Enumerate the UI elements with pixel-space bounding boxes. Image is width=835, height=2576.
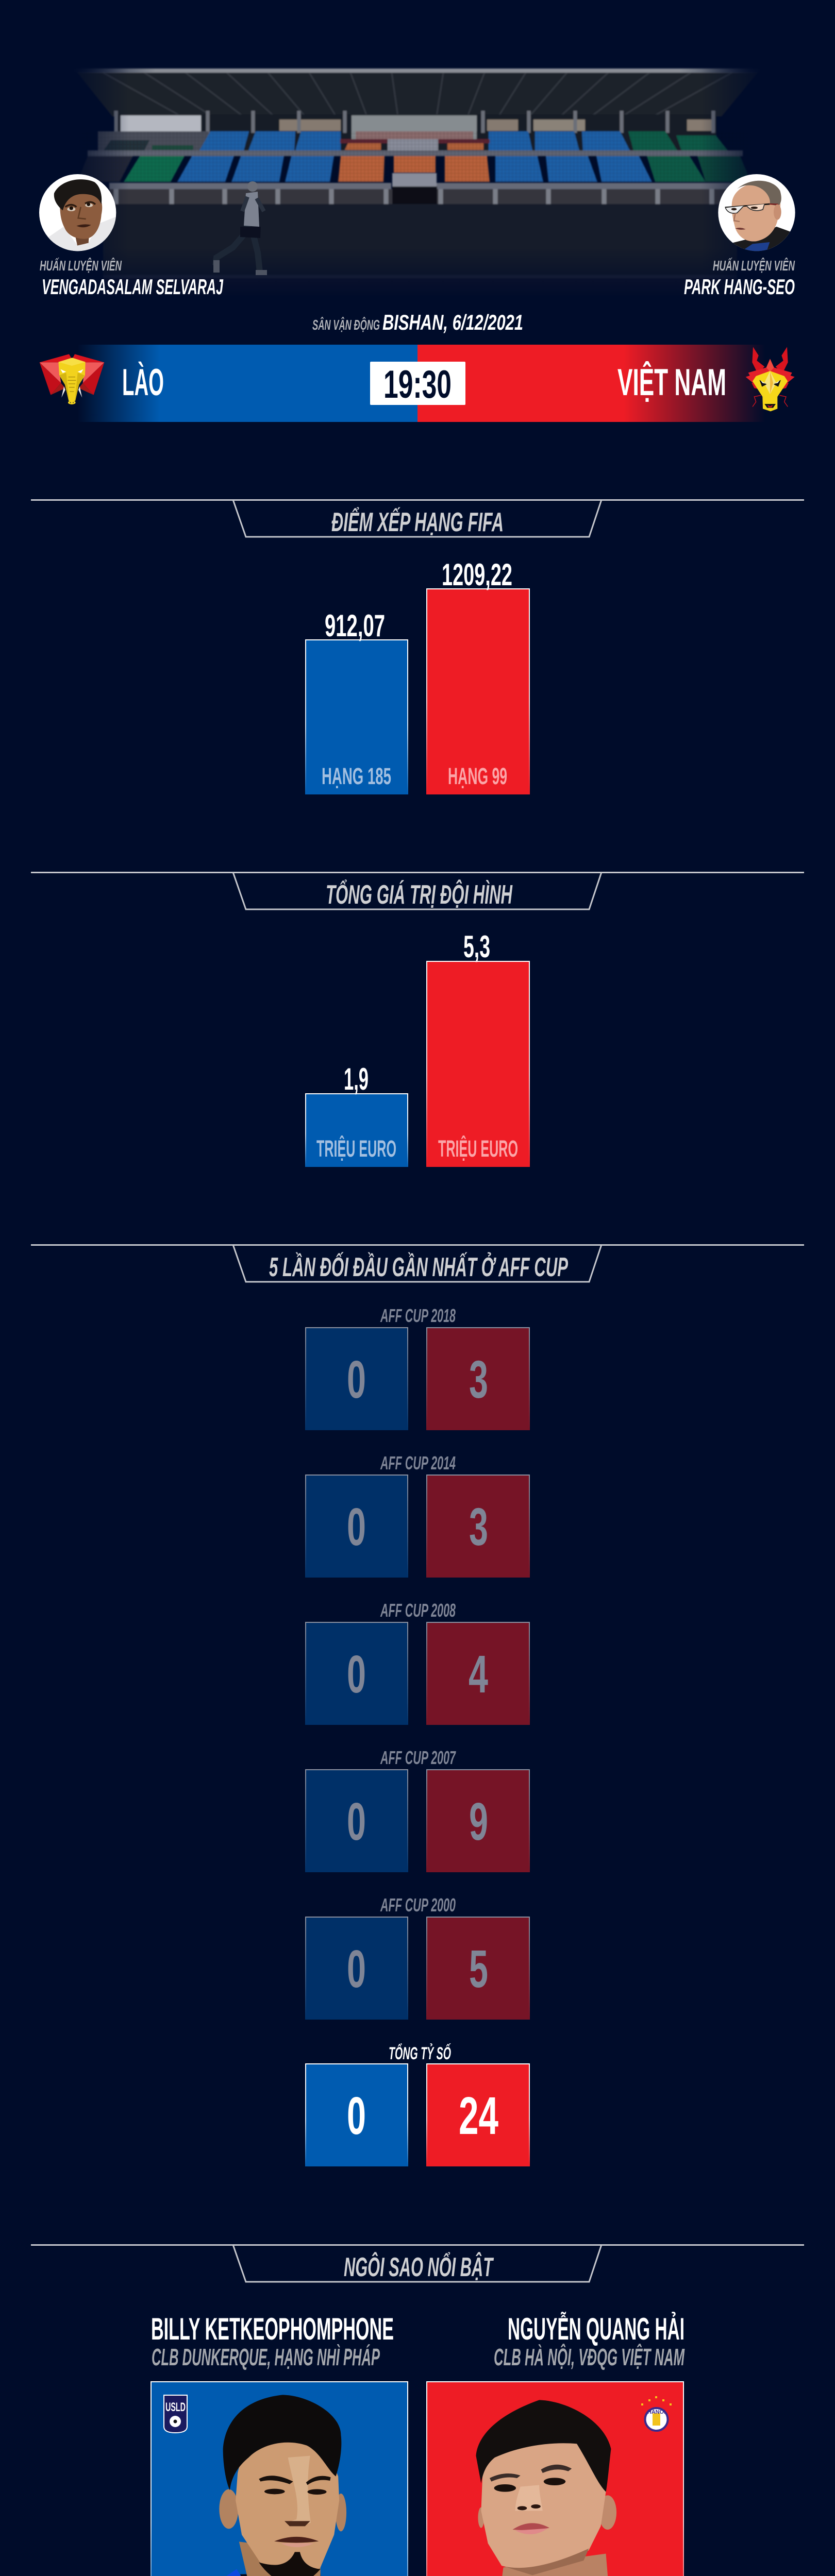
match banner — [40, 345, 795, 422]
bar: Vietnam value — [426, 929, 530, 1167]
match: AFF Cup 2008: 4 — [469, 1645, 488, 1704]
logo: Vietnam dragon — [746, 347, 795, 411]
kickoff time: 19:30 — [383, 363, 452, 406]
player card: Nguyễn Quang Hải: CLB HÀ NỘI, VĐQG VIỆT NAM — [494, 2344, 685, 2370]
bar chart: FIFA points — [305, 557, 530, 794]
section heading: FIFA: ĐIỂM XẾP HẠNG FIFA — [331, 507, 504, 537]
match: AFF Cup 2007: AFF CUP 2007 — [380, 1747, 456, 1768]
total score — [305, 2043, 530, 2166]
match: AFF Cup 2000: AFF CUP 2000 — [380, 1894, 456, 1916]
bar: Vietnam — [426, 557, 530, 794]
player card: Billy Ketkeophomphone: CLB DUNKERQUE, HẠNG NHÌ PHÁP — [152, 2344, 380, 2370]
runner — [213, 181, 267, 275]
match: AFF Cup 2008 — [305, 1600, 530, 1725]
bar chart: squad value — [305, 929, 530, 1167]
bar: Laos: HẠNG 185 — [322, 763, 391, 789]
match: AFF Cup 2008: AFF CUP 2008 — [380, 1600, 456, 1621]
total score: TỔNG TỶ SỐ — [389, 2043, 451, 2063]
club logo: Hà Nội FC — [641, 2396, 672, 2431]
match: AFF Cup 2014: 3 — [469, 1497, 488, 1556]
portrait: Billy — [151, 2395, 365, 2576]
logo: Laos elephant — [40, 354, 104, 404]
coach caption left — [40, 258, 224, 299]
match: AFF Cup 2000: 0 — [347, 1939, 366, 1998]
bar: Laos — [305, 608, 408, 794]
section heading: head to head — [31, 1244, 804, 1282]
section heading: head to head: 5 LẦN ĐỐI ĐẦU GẦN NHẤT Ở AFF CUP — [269, 1252, 568, 1282]
section heading: FIFA — [31, 499, 804, 537]
venue and date: SÂN VẬN ĐỘNG — [312, 316, 380, 333]
venue and date — [312, 310, 523, 334]
bar: Vietnam value: 5,3 — [463, 929, 490, 964]
coach caption left: HUẤN LUYỆN VIÊN — [40, 258, 122, 274]
match: AFF Cup 2014: AFF CUP 2014 — [380, 1452, 456, 1473]
stadium background photo — [62, 67, 773, 299]
club logo: Hà Nội FC: HANOI — [647, 2409, 665, 2415]
bar: Vietnam value: TRIỆU EURO — [438, 1136, 518, 1162]
match: AFF Cup 2007: 0 — [347, 1792, 366, 1851]
match: AFF Cup 2018: 0 — [347, 1350, 366, 1409]
coach caption right — [684, 258, 795, 299]
bar: Laos value — [305, 1062, 408, 1167]
section heading: stars: NGÔI SAO NỔI BẬT — [344, 2252, 494, 2282]
section heading: stars — [31, 2244, 804, 2282]
match: AFF Cup 2000: 5 — [469, 1939, 488, 1998]
match: AFF Cup 2007 — [305, 1747, 530, 1872]
portrait: Quang Hải — [457, 2400, 683, 2576]
section heading: squad value — [31, 872, 804, 910]
player card: Billy Ketkeophomphone: BILLY KETKEOPHOMPHONE — [151, 2312, 394, 2346]
match: AFF Cup 2018 — [305, 1305, 530, 1430]
match: AFF Cup 2008: 0 — [347, 1645, 366, 1704]
total score: 0 — [347, 2086, 366, 2145]
bar: Laos value: TRIỆU EURO — [316, 1136, 396, 1162]
team name Lào: LÀO — [122, 362, 164, 403]
match: AFF Cup 2014 — [305, 1452, 530, 1578]
bar: Laos: 912,07 — [325, 608, 385, 643]
match: AFF Cup 2018: 3 — [469, 1350, 488, 1409]
match: AFF Cup 2000 — [305, 1894, 530, 2020]
player card: Billy Ketkeophomphone — [151, 2312, 408, 2576]
bar: Vietnam: HẠNG 99 — [448, 763, 507, 789]
match: AFF Cup 2014: 0 — [347, 1497, 366, 1556]
club logo: USLD: USLD — [165, 2400, 186, 2414]
player card: Nguyễn Quang Hải — [426, 2312, 685, 2576]
venue and date: BISHAN, 6/12/2021 — [382, 310, 523, 334]
total score: 24 — [459, 2086, 498, 2145]
coach portrait: Park Hang-seo — [718, 174, 795, 252]
team name Việt Nam: VIỆT NAM — [617, 362, 726, 403]
match: AFF Cup 2018: AFF CUP 2018 — [380, 1305, 456, 1326]
match: AFF Cup 2007: 9 — [469, 1792, 488, 1851]
player card: Nguyễn Quang Hải: NGUYỄN QUANG HẢI — [508, 2312, 684, 2346]
bar: Vietnam: 1209,22 — [442, 557, 512, 592]
bar: Laos value: 1,9 — [344, 1062, 369, 1096]
section heading: squad value: TỔNG GIÁ TRỊ ĐỘI HÌNH — [326, 879, 513, 910]
coach caption left: VENGADASALAM SELVARAJ — [42, 275, 224, 299]
club logo: USLD — [164, 2395, 187, 2433]
coach portrait: Selvaraj — [39, 174, 117, 252]
